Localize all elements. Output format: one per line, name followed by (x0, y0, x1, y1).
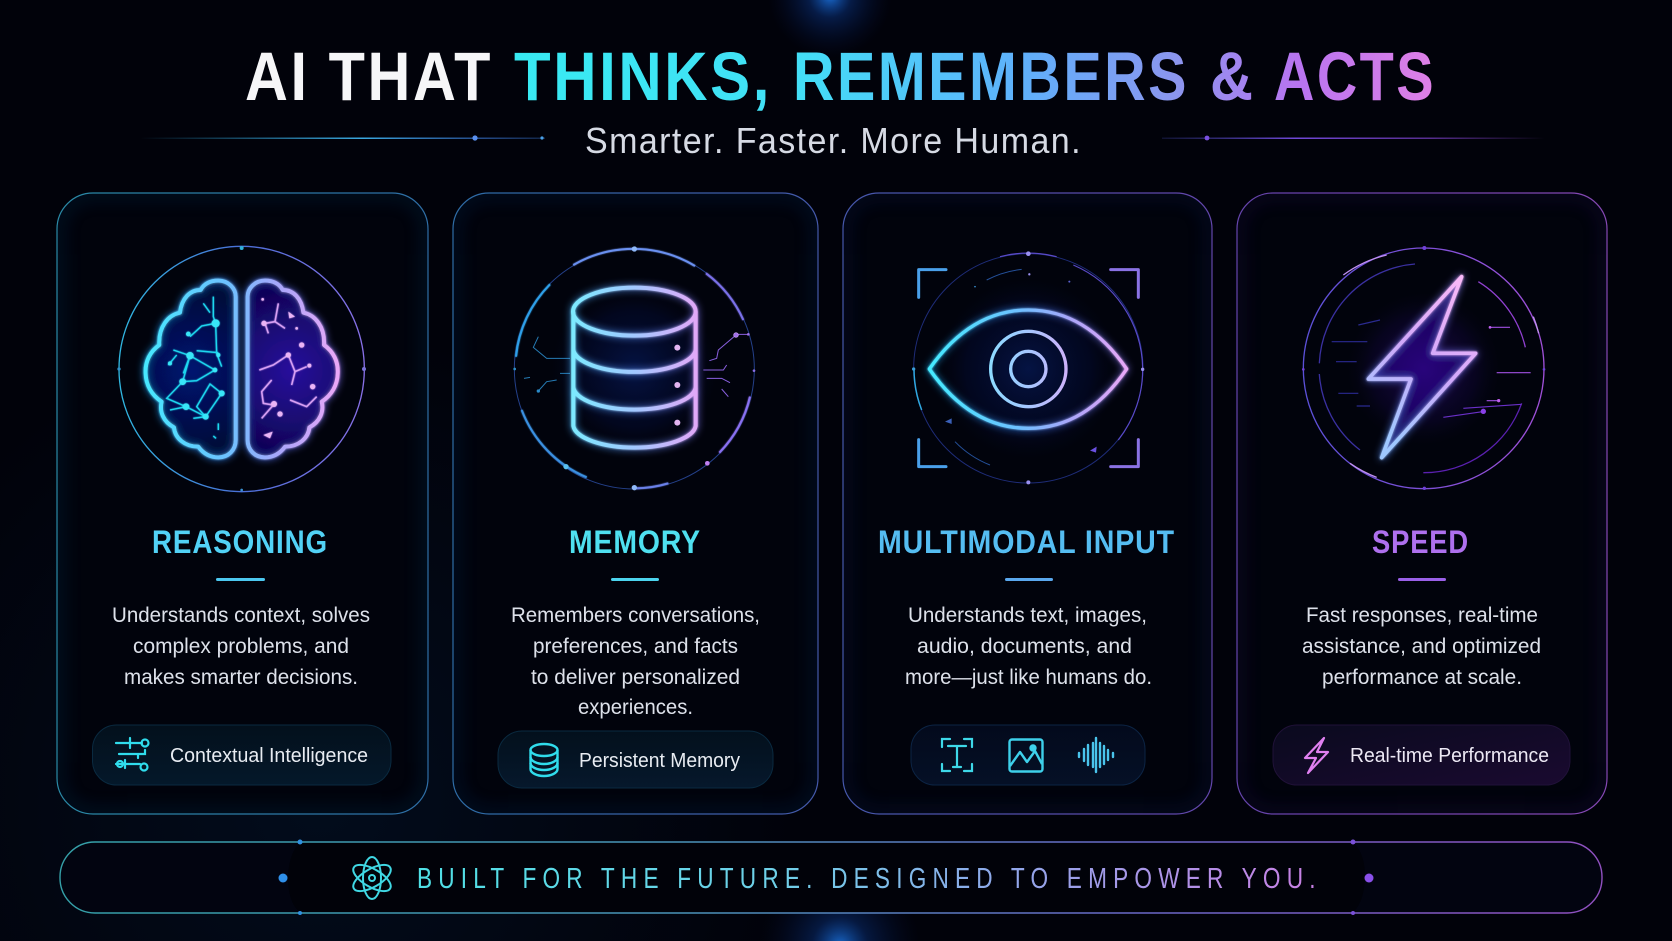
title: THINKS, (514, 38, 772, 115)
pill: real-time performance: Real-time Performance (1350, 745, 1549, 767)
description: reasoning: makes smarter decisions. (124, 666, 358, 689)
pill: input types (911, 725, 1145, 785)
pill: persistent memory: Persistent Memory (579, 750, 740, 772)
banner (60, 840, 1602, 915)
description: speed (1302, 604, 1541, 689)
description: speed: performance at scale. (1322, 666, 1522, 689)
panel: memory (453, 193, 818, 814)
icon: image (1010, 740, 1042, 772)
icon: audio wave (1079, 738, 1113, 772)
right header divider (1162, 136, 1545, 140)
subtitle: Smarter. Faster. More Human. (585, 120, 1082, 161)
description: speed: Fast responses, real-time (1306, 604, 1538, 627)
left header divider (140, 135, 545, 141)
icon: text (942, 739, 972, 771)
panel: speed (1237, 193, 1607, 814)
pill: real-time performance (1273, 725, 1570, 785)
icon: brain (117, 246, 366, 492)
description: memory: preferences, and facts (533, 635, 738, 658)
description: multimodal input (905, 604, 1152, 689)
icon: eye (912, 251, 1144, 484)
icon: atom (349, 857, 395, 899)
title: & (1210, 38, 1253, 115)
icon: circuit (116, 738, 148, 770)
title: ACTS (1274, 38, 1436, 115)
panel: multimodal input (843, 193, 1212, 814)
title: AI THAT (245, 38, 493, 115)
description: reasoning: complex problems, and (133, 635, 349, 658)
panel: reasoning (57, 193, 428, 814)
heading: speed: SPEED (1372, 524, 1469, 560)
description: multimodal input: Understands text, images, (908, 604, 1147, 627)
icon: database (513, 246, 755, 490)
description: memory: to deliver personalized (531, 666, 740, 689)
icon: lightning bolt (1302, 246, 1545, 490)
description: memory (511, 604, 760, 719)
heading: memory: MEMORY (569, 524, 701, 560)
pill: contextual intelligence (92, 725, 391, 785)
description: multimodal input: audio, documents, and (917, 635, 1132, 658)
description: memory: experiences. (578, 696, 693, 719)
heading: multimodal input: MULTIMODAL INPUT (878, 524, 1175, 560)
title: REMEMBERS (793, 38, 1189, 115)
icon: small database (530, 744, 558, 776)
description: reasoning: Understands context, solves (112, 604, 370, 627)
icon: small bolt (1305, 738, 1328, 773)
description: memory: Remembers conversations, (511, 604, 760, 627)
description: reasoning (112, 604, 370, 689)
description: multimodal input: more—just like humans do. (905, 666, 1152, 689)
pill: contextual intelligence: Contextual Intelligence (170, 745, 368, 767)
pill: persistent memory (498, 731, 773, 788)
description: speed: assistance, and optimized (1302, 635, 1541, 658)
title (245, 38, 1436, 115)
heading: reasoning: REASONING (152, 524, 328, 560)
tagline: BUILT FOR THE FUTURE. DESIGNED TO EMPOWER YOU. (417, 861, 1316, 895)
